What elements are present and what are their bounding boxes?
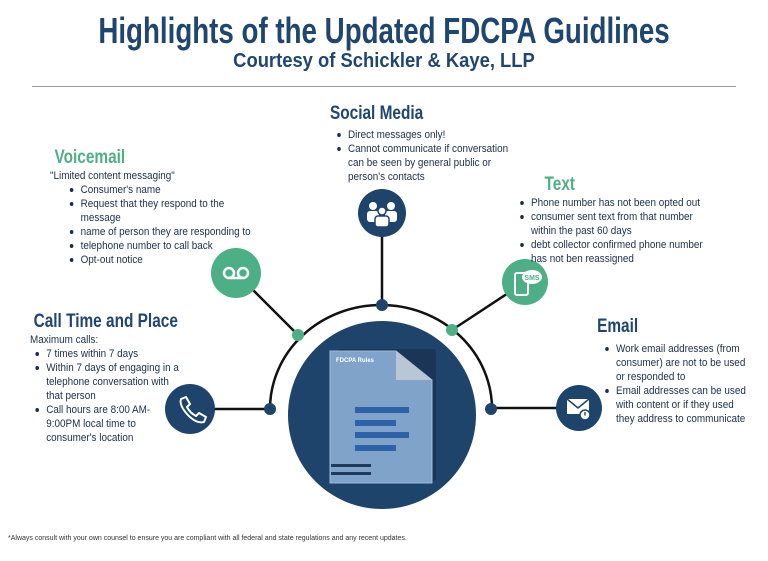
panel: call time and place: 7 times within 7 days <box>46 348 138 360</box>
icon: email <box>556 385 602 431</box>
panel: text: debt collector confirmed phone number <box>531 239 703 251</box>
connectors <box>190 213 579 409</box>
icon: SMS: SMS <box>524 275 540 282</box>
panel: voicemail <box>50 147 251 266</box>
title: Highlights of the Updated FDCPA Guidlines <box>98 10 670 51</box>
icon: social media <box>358 189 406 237</box>
panel: voicemail: Voicemail <box>54 147 125 168</box>
panel: social media: person's contacts <box>348 171 425 183</box>
panel: call time and place: 9:00PM local time to <box>46 418 136 430</box>
central circle with document: FDCPA Rules <box>336 358 375 364</box>
panel: call time and place <box>30 311 179 444</box>
footnote: *Always consult with your own counsel to ensure you are compliant with all federal and state regulations and any recent updates. <box>8 535 407 542</box>
panel: call time and place: Call hours are 8:00 AM- <box>46 404 150 416</box>
junction dots <box>264 299 497 415</box>
panel: call time and place: that person <box>46 390 96 402</box>
panel: email: Email <box>597 316 638 337</box>
panel: call time and place: Maximum calls: <box>30 334 98 346</box>
icon: SMS <box>502 259 548 305</box>
panel: voicemail: message <box>81 212 121 224</box>
panel: text: Phone number has not been opted out <box>531 197 700 209</box>
panel: email: Email addresses can be used <box>616 385 746 397</box>
panel: voicemail: Request that they respond to the <box>81 198 224 210</box>
panel: email <box>597 316 746 425</box>
panel: email: Work email addresses (from <box>616 343 740 355</box>
central circle with document <box>288 321 476 509</box>
panel: call time and place: consumer's location <box>46 432 133 444</box>
panel: voicemail: telephone number to call back <box>81 240 213 252</box>
panel: social media: Cannot communicate if conversation <box>348 143 508 155</box>
panel: voicemail: name of person they are responding to <box>81 226 251 238</box>
panel: call time and place: Call Time and Place <box>34 311 178 332</box>
panel: call time and place: telephone conversation with <box>46 376 169 388</box>
panel: call time and place: Within 7 days of engaging in a <box>46 362 179 374</box>
panel: voicemail: Consumer's name <box>81 184 161 196</box>
panel: email: with content or if they used <box>616 399 734 411</box>
panel: social media: Direct messages only! <box>348 129 445 141</box>
panel: voicemail: "Limited content messaging" <box>50 170 175 182</box>
panel: text: within the past 60 days <box>531 225 632 237</box>
subtitle: Courtesy of Schickler & Kaye, LLP <box>233 50 535 72</box>
panel: social media: can be seen by general public or <box>348 157 491 169</box>
icon: phone <box>165 384 215 434</box>
panel: email: consumer) are not to be used <box>616 357 745 369</box>
panel: email: they address to communicate <box>616 413 745 425</box>
panel: text: has not ben reassigned <box>531 253 634 265</box>
panel: social media: Social Media <box>330 103 423 124</box>
panel: voicemail: Opt-out notice <box>81 254 143 266</box>
icon: voicemail <box>211 248 261 298</box>
panel: email: or responded to <box>616 371 685 383</box>
panel: social media <box>330 103 508 183</box>
panel: text: consumer sent text from that number <box>531 211 693 223</box>
panel: text <box>520 174 703 265</box>
panel: text: Text <box>544 174 575 195</box>
